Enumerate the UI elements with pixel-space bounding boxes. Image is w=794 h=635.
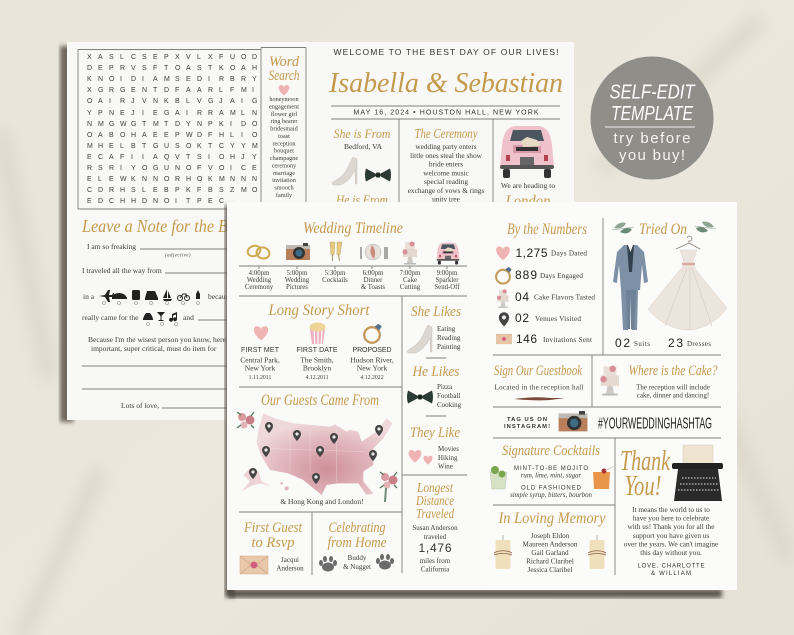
timeline labels: 6:00pm — [363, 270, 384, 277]
timeline labels: Cake — [403, 277, 417, 284]
panel: longest distance traveled: Traveled — [416, 507, 455, 522]
word list: ceremony — [272, 162, 297, 170]
milestones: PROPOSED — [352, 347, 392, 354]
panel: he likes: Football — [437, 392, 460, 400]
word search grid: KNOIDIAMSEDIRBRY — [87, 76, 257, 83]
icon: heart — [254, 326, 268, 340]
word list: flower girl — [271, 111, 297, 118]
icon: dinner plate — [361, 244, 387, 260]
panel: in loving memory: In Loving Memory — [498, 510, 606, 527]
panel: she likes — [407, 304, 461, 353]
panel: first guest to rsvp: First Guest — [243, 520, 303, 536]
map pins — [249, 422, 383, 484]
word search grid — [78, 48, 306, 209]
panel: hashtag: INSTAGRAM! — [504, 424, 550, 430]
panel: in loving memory: Gail Garland — [531, 549, 569, 557]
thank you message: have you here to celebrate — [633, 514, 709, 522]
timeline labels: 7:00pm — [400, 270, 421, 277]
badge: self-edit template: you buy! — [619, 147, 685, 164]
panel: he likes: Pizza — [437, 383, 453, 391]
word search grid: OABOHAEEPWDFHLIO — [87, 132, 258, 139]
panel: our guests came from: & Hong Kong and London! — [280, 497, 364, 506]
thank you message: this day without you. — [640, 548, 702, 557]
panel: celebrating from home: from Home — [328, 535, 387, 551]
panel: the ceremony: special reading — [424, 177, 468, 186]
word search grid: EDCHHDNOITPEC — [87, 198, 224, 205]
timeline labels — [245, 270, 460, 291]
statistics: 04 — [515, 290, 529, 304]
icon: heart — [496, 246, 510, 260]
statistics: Days Engaged — [540, 272, 583, 280]
timeline labels: Cocktails — [322, 277, 348, 284]
statistics: suits and dresses: 23 — [668, 336, 683, 350]
panel: longest distance traveled: miles from — [420, 557, 451, 565]
timeline labels: Sparkler — [435, 277, 459, 284]
panel: our guests came from — [237, 392, 398, 506]
word search grid: ELEWKNNORHOKMNNN — [87, 176, 257, 183]
panel: longest distance traveled: traveled — [424, 533, 447, 541]
word list: engagement — [269, 104, 299, 110]
panel: she is from — [332, 126, 391, 207]
panel: she likes: Eating — [437, 325, 456, 333]
timeline labels: Pictures — [286, 284, 308, 291]
milestones — [240, 347, 394, 381]
panel: signature cocktails: MINT-TO-BE MOJITO — [514, 466, 588, 472]
panel: signature cocktails — [490, 443, 614, 499]
panel: tried on: Tried On — [639, 221, 687, 238]
note form lines: and — [183, 313, 194, 322]
title: couple names: Isabella & Sebastian — [328, 67, 563, 99]
panel: the ceremony: wedding party enters — [415, 142, 477, 151]
statistics: 02 — [515, 311, 529, 325]
badge: self-edit template: SELF-EDIT — [610, 82, 696, 104]
panel: celebrating from home: & Nugget — [343, 563, 371, 571]
date and venue band — [331, 106, 560, 119]
timeline labels: 5:30pm — [325, 270, 346, 277]
panel: they like: Movies — [438, 445, 459, 453]
milestones: New York — [357, 364, 387, 372]
note form lines — [82, 242, 232, 410]
panel: the ceremony: exchange of vows & rings — [408, 186, 484, 195]
panel: in loving memory: Richard Claribel — [526, 558, 574, 566]
panel: celebrating from home — [319, 520, 394, 572]
word list: bridesmaid — [270, 126, 299, 132]
panel: thank you: Thank — [620, 446, 670, 477]
icon: rings — [246, 244, 271, 260]
shadow behind back sheet — [60, 46, 74, 422]
panel: she is from: He is From — [335, 192, 388, 207]
map: united states — [242, 413, 393, 495]
panel: the ceremony: little ones steal the show — [410, 151, 483, 160]
milestones: Hudson River, — [350, 356, 394, 364]
note form lines: because — [208, 292, 232, 301]
word search grid: XGRGENTDFAARLFMI — [87, 87, 254, 94]
milestones: 4.12.2022 — [360, 375, 384, 381]
thank you message: with us! Thank you for all the — [627, 522, 715, 531]
statistics: 1,275 — [516, 246, 548, 260]
milestones: FIRST MET — [241, 347, 280, 354]
word list: marriage — [273, 170, 295, 177]
statistics: Days Dated — [551, 250, 587, 258]
panel: she likes: She Likes — [411, 304, 461, 320]
word search grid: XASLCSEPXVLXFUOD — [87, 54, 257, 61]
panel: they like: They Like — [410, 425, 460, 441]
word list: champagne — [270, 155, 298, 162]
icon: popcorn — [310, 322, 326, 344]
timeline labels: Wedding — [285, 277, 310, 284]
panel: tried on — [612, 221, 727, 350]
timeline labels: Send-Off — [434, 284, 460, 291]
panel: the ceremony: unity tree — [432, 194, 460, 204]
panel: sign our guestbook: Located in the reception hall — [494, 384, 584, 392]
panel: he likes: Cooking — [437, 401, 462, 409]
panel: signature cocktails: rum, lime, mint, sugar — [521, 472, 582, 480]
thank you message: over the years. We can't imagine — [624, 540, 718, 548]
note form lines: in a — [83, 292, 95, 301]
panel: first guest to rsvp: to Rsvp — [252, 535, 295, 551]
panel: they like — [409, 425, 460, 470]
panel: where is the cake: cake, dinner and dancing! — [637, 392, 709, 400]
icon: heart — [279, 85, 289, 96]
icon: engagement ring — [364, 324, 382, 343]
panel: the ceremony: welcome music — [423, 168, 470, 178]
word search grid: CDRHSLEBPKFBSZMO — [87, 187, 258, 194]
panel: back sheet — [67, 42, 574, 420]
panel: she is from: She is From — [334, 126, 390, 141]
panel: long story short — [240, 302, 394, 381]
panel: she likes: Painting — [437, 343, 461, 351]
panel: signature cocktails: simple syrup, bitters, bourbon — [510, 492, 592, 499]
milestones: 4.12.2011 — [306, 375, 329, 381]
heading: leave a note for the bride: Leave a Note for the Bride — [81, 216, 254, 236]
statistics: Venues Visited — [535, 315, 581, 323]
timeline labels: 5:00pm — [287, 270, 308, 277]
note form lines: I am so freaking — [87, 242, 136, 251]
panel: in loving memory: Joseph Eldon — [531, 532, 570, 540]
panel: where is the cake: The reception will include — [636, 384, 710, 392]
word search grid: OAIRJVNKBLVGJAIG — [87, 98, 257, 105]
word search grid: ECAFIIAQVTSIOHJY — [87, 154, 257, 161]
panel: hashtag: TAG US ON — [507, 417, 547, 423]
timeline labels: 4:00pm — [249, 270, 270, 277]
icon: leaves right — [694, 222, 716, 232]
panel: thank you: You! — [624, 471, 662, 502]
statistics: suits and dresses: Dresses — [687, 340, 711, 348]
word search grid: DEPRVSFTOASTKOAH — [87, 65, 257, 72]
icon: tiered cake — [402, 242, 417, 264]
panel: he likes — [407, 364, 462, 409]
panel: long story short: Long Story Short — [268, 302, 370, 319]
icon: getaway car — [437, 243, 459, 264]
heading: word search: Search — [268, 68, 300, 84]
panel: longest distance traveled: 1,476 — [418, 541, 452, 555]
statistics: Invitations Sent — [543, 336, 592, 344]
icon: mojito — [490, 466, 507, 489]
milestones: 1.11.2011 — [249, 375, 271, 381]
word list — [269, 96, 299, 199]
panel: our guests came from: Our Guests Came From — [261, 392, 379, 409]
panel: heading to london — [500, 126, 555, 210]
badge: self-edit template — [590, 56, 714, 180]
word list: invitation — [272, 177, 296, 184]
icon: quill pen — [514, 397, 565, 400]
panel: longest distance traveled — [412, 481, 458, 574]
thank you message: It means the world to us to — [632, 505, 710, 514]
panel: where is the cake: Where is the Cake? — [628, 363, 718, 379]
panel: he likes: He Likes — [412, 364, 460, 380]
panel: sign our guestbook — [494, 363, 584, 400]
heading: word search — [268, 54, 300, 84]
badge: self-edit template: try before — [614, 130, 690, 147]
panel: first guest to rsvp: Anderson — [276, 564, 304, 572]
statistics: Cake Flavors Tasted — [534, 294, 595, 302]
heading: word search: Word — [269, 54, 299, 70]
milestones: FIRST DATE — [296, 347, 338, 354]
panel: they like: Wine — [438, 462, 453, 470]
panel: thank you: & WILLIAM — [651, 571, 691, 577]
note form lines: (adjective) — [165, 254, 191, 258]
panel: they like: Hiking — [438, 454, 458, 462]
statistics: suits and dresses — [615, 336, 711, 350]
word search grid: RSRIYOGUNOFVOICE — [87, 165, 257, 172]
shadow under front sheet — [225, 205, 235, 597]
panel: longest distance traveled: Susan Anderson — [412, 524, 458, 532]
icon: bouquet — [380, 472, 398, 502]
panel: hashtag — [504, 411, 712, 432]
statistics: suits and dresses: Suits — [634, 340, 650, 348]
word list: smooch — [274, 184, 295, 192]
panel: heading to london: We are heading to — [501, 181, 555, 190]
panel: thank you: LOVE, CHARLOTTE — [638, 564, 704, 570]
panel: signature cocktails: OLD FASHIONED — [521, 486, 582, 492]
icon: ring — [496, 267, 512, 284]
word search grid: MHELBTGUSOKTCYYM — [87, 143, 258, 150]
panel: wedding timeline: Wedding Timeline — [303, 220, 403, 237]
panel: the ceremony: bride enters — [429, 160, 463, 168]
panel: wedding timeline — [239, 220, 467, 291]
icon: pin — [499, 312, 509, 326]
panel: she is from: Bedford, VA — [344, 142, 383, 151]
icon: champagne — [330, 242, 342, 261]
word list: family — [276, 192, 293, 199]
illustration: suit — [613, 245, 648, 330]
panel: first guest to rsvp: Jacqui — [281, 556, 299, 564]
panel: longest distance traveled: Distance — [415, 494, 454, 509]
statistics: 146 — [516, 332, 537, 346]
icons: option circles — [102, 302, 200, 326]
word list: ring bearer — [271, 118, 297, 125]
statistics: 889 — [515, 268, 537, 282]
icon: camera — [286, 243, 310, 260]
panel: first guest to rsvp — [240, 520, 304, 574]
timeline labels: & Toasts — [361, 284, 385, 291]
icon: floral sprig — [237, 412, 254, 428]
panel: in loving memory: Jessica Claribel — [528, 566, 572, 574]
panel: celebrating from home: Buddy — [348, 554, 367, 562]
milestones: Central Park, — [240, 356, 280, 364]
milestones: Brooklyn — [303, 364, 331, 372]
timeline labels: Cutting — [400, 284, 421, 291]
statistics: suits and dresses: 02 — [615, 336, 630, 350]
heading: welcome: WELCOME TO THE BEST DAY OF OUR LIVES! — [334, 47, 558, 57]
panel: she likes: Reading — [437, 334, 461, 342]
panel: by the numbers: By the Numbers — [507, 221, 587, 238]
panel: longest distance traveled: California — [421, 566, 450, 574]
note form lines: I traveled all the way from — [82, 266, 162, 275]
word list: honeymoon — [269, 96, 299, 103]
note form lines: Because I'm the wisest person you know, here — [88, 335, 227, 344]
panel: in loving memory — [494, 510, 606, 574]
icon: typewriter — [672, 445, 723, 501]
word search grid: NMGWGTMTDYNPKIDO — [87, 121, 258, 128]
panel: in loving memory: Maureen Anderson — [523, 540, 578, 548]
panel: the ceremony — [408, 127, 484, 204]
panel: by the numbers — [496, 221, 595, 346]
panel: heading to london: London — [505, 193, 550, 210]
note form lines: really came for the — [82, 313, 139, 322]
note form lines: important, super critical, must do item for — [91, 344, 217, 353]
panel: celebrating from home: Celebrating — [328, 520, 386, 536]
statistics — [515, 246, 595, 346]
panel: signature cocktails: Signature Cocktails — [502, 443, 600, 459]
timeline labels: 9:00pm — [437, 270, 458, 277]
panel: thank you — [620, 445, 723, 577]
icons: transport and activity choices — [99, 289, 200, 322]
icon: old fashioned — [593, 466, 614, 489]
date and venue band: MAY 16, 2024 • HOUSTON HALL, NEW YORK — [354, 110, 539, 116]
panel: longest distance traveled: Longest — [416, 481, 454, 496]
note form lines: Lots of love, — [121, 401, 159, 410]
timeline axis — [239, 266, 467, 269]
milestones: The Smith, — [300, 356, 334, 364]
word list: toast — [278, 133, 290, 140]
panel: the ceremony: The Ceremony — [414, 127, 478, 142]
icon: envelope — [496, 334, 512, 344]
thank you message — [624, 505, 718, 557]
icon: leaves — [612, 223, 634, 233]
word search grid: YPNEJIEGAIRRAMLN — [87, 110, 257, 117]
panel: front sheet — [227, 202, 737, 590]
illustration: dress — [648, 236, 727, 330]
milestones: New York — [245, 364, 275, 372]
timeline labels: Dinner — [364, 277, 383, 284]
panel: sign our guestbook: Sign Our Guestbook — [494, 363, 582, 379]
timeline labels: Wedding — [247, 277, 272, 284]
icon: cake — [497, 289, 509, 308]
panel: where is the cake — [600, 363, 718, 400]
timeline labels: Ceremony — [245, 284, 274, 291]
thank you message: support you have given us — [633, 531, 709, 540]
word list: reception — [272, 140, 296, 148]
badge: self-edit template: TEMPLATE — [611, 103, 694, 125]
word list: bouquet — [274, 148, 294, 154]
